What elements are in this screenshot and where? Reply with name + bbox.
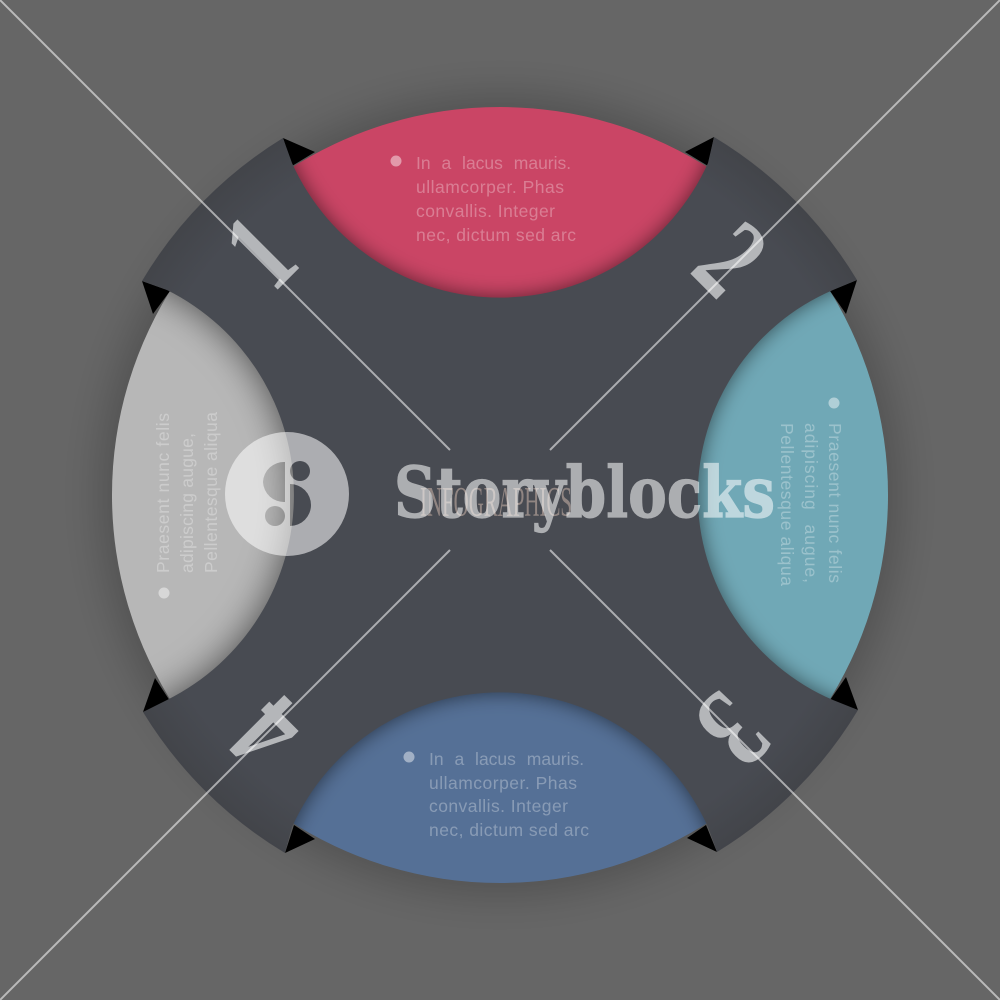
text block: red: In a lacus mauris. [416,153,571,173]
inner shadow on grey segment [157,292,294,698]
text block: red: nec, dictum sed arc [416,225,576,245]
panel: grey segment [112,280,500,710]
dark cross panel [142,137,858,853]
outer ring shadow [100,95,900,895]
text block: grey: Praesent nunc felis [153,413,173,573]
text block: grey [153,412,221,598]
inner shadows on coloured segments [294,159,837,830]
text block: teal [777,398,845,586]
watermark wordmark: Storyblocks [394,451,775,534]
text block: teal: adipiscing augue, [801,423,821,583]
fold corners [142,137,858,853]
text: INFOGRAPHICS [420,480,572,526]
text block: grey: Pellentesque aliqua [201,412,221,573]
panel: blue segment [285,495,715,883]
number 1: 1 [199,191,321,313]
text block: blue: convallis. Integer [429,796,568,816]
number 2: 2 [669,197,793,321]
text block: red: convallis. Integer [416,201,555,221]
number 3: 3 [671,668,795,792]
text block: red: ullamcorper. Phas [416,177,564,197]
panel: red segment [285,107,715,495]
number 4: 4 [205,671,329,795]
text block: red [390,153,576,245]
text block: blue: nec, dictum sed arc [429,820,589,840]
panel: teal segment [500,280,888,710]
text block: teal: Praesent nunc felis [825,423,845,583]
text block: grey: adipiscing augue, [177,433,197,573]
text block: blue: In a lacus mauris. [429,749,584,769]
text block: blue [404,749,589,840]
watermark logo [225,432,349,556]
text block: blue: ullamcorper. Phas [429,773,577,793]
text block: teal: Pellentesque aliqua [777,423,797,586]
